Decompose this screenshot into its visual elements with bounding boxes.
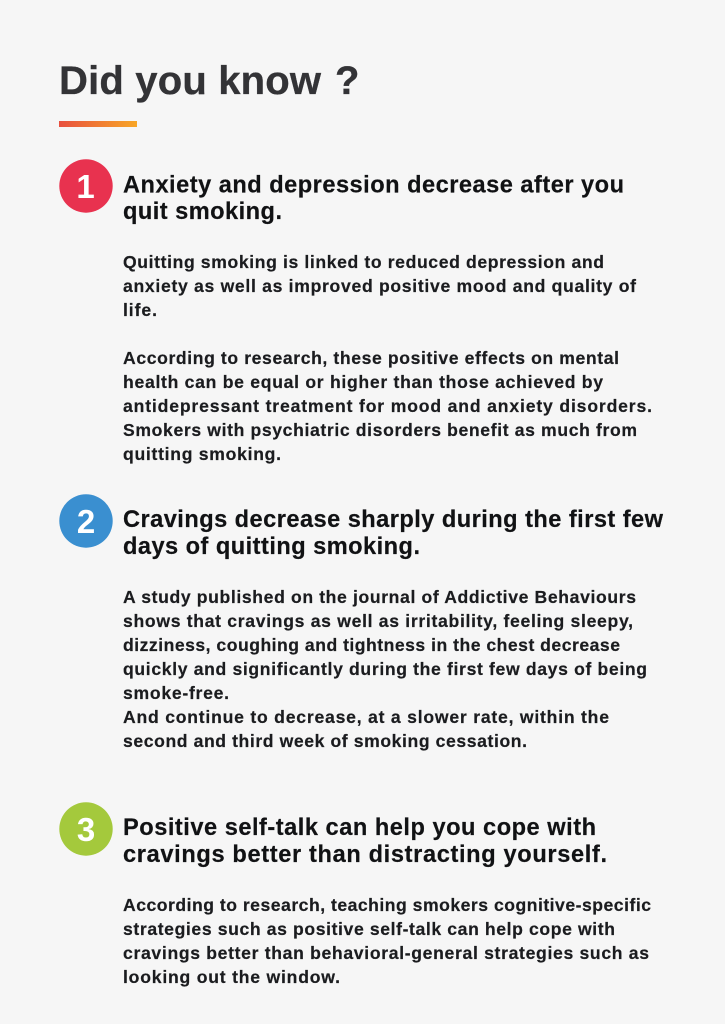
heading 2: Cravings decrease sharply during the first few [123, 507, 664, 533]
heading 1: Anxiety and depression decrease after you [123, 172, 624, 198]
badge 3 [59, 802, 113, 856]
badge 3: 3 [77, 811, 95, 848]
body 1 paragraph 1 [123, 252, 636, 320]
body 1 paragraph 1: Quitting smoking is linked to reduced depression and [123, 252, 604, 272]
heading 3: cravings better than distracting yourself. [123, 842, 607, 868]
body 2: And continue to decrease, at a slower rate, within the [123, 707, 609, 727]
panel: item 1 [59, 159, 652, 464]
badge 1 [59, 159, 113, 213]
badge 1: 1 [76, 168, 95, 205]
body 1 paragraph 2: antidepressant treatment for mood and anxiety disorders. [123, 396, 652, 416]
body 3: cravings better than behavioral-general strategies such as [123, 943, 649, 963]
heading 2 [123, 507, 664, 560]
heading 3: Positive self-talk can help you cope with [123, 815, 596, 841]
body 2: smoke-free. [123, 683, 229, 703]
body 1 paragraph 1: anxiety as well as improved positive mood and quality of [123, 276, 636, 296]
panel: item 3 [59, 802, 651, 987]
body 1 paragraph 2: According to research, these positive effects on mental [123, 348, 619, 368]
body 3: looking out the window. [123, 967, 340, 987]
heading 3 [123, 815, 607, 868]
body 2: A study published on the journal of Addictive Behaviours [123, 587, 636, 607]
badge 2: 2 [77, 503, 95, 540]
panel: item 2 [59, 494, 664, 751]
body 3 [123, 895, 651, 987]
badge 2 [59, 494, 113, 548]
title: Did you know [59, 59, 322, 103]
body 1 paragraph 2: quitting smoking. [123, 444, 281, 464]
body 2: dizziness, coughing and tightness in the chest decrease [123, 635, 620, 655]
title underline [59, 121, 137, 127]
heading 1 [123, 172, 624, 225]
body 3: strategies such as positive self-talk can help cope with [123, 919, 615, 939]
body 3: According to research, teaching smokers cognitive-specific [123, 895, 651, 915]
body 1 paragraph 2: health can be equal or higher than those achieved by [123, 372, 603, 392]
title: ? [335, 59, 359, 103]
body 2 [123, 587, 647, 751]
body 2: quickly and significantly during the first few days of being [123, 659, 647, 679]
body 1 paragraph 2: Smokers with psychiatric disorders benefit as much from [123, 420, 637, 440]
body 2: second and third week of smoking cessation. [123, 731, 527, 751]
heading 2: days of quitting smoking. [123, 534, 420, 560]
heading 1: quit smoking. [123, 199, 282, 225]
body 2: shows that cravings as well as irritability, feeling sleepy, [123, 611, 633, 631]
body 1 paragraph 1: life. [123, 300, 157, 320]
body 1 paragraph 2 [123, 348, 652, 464]
